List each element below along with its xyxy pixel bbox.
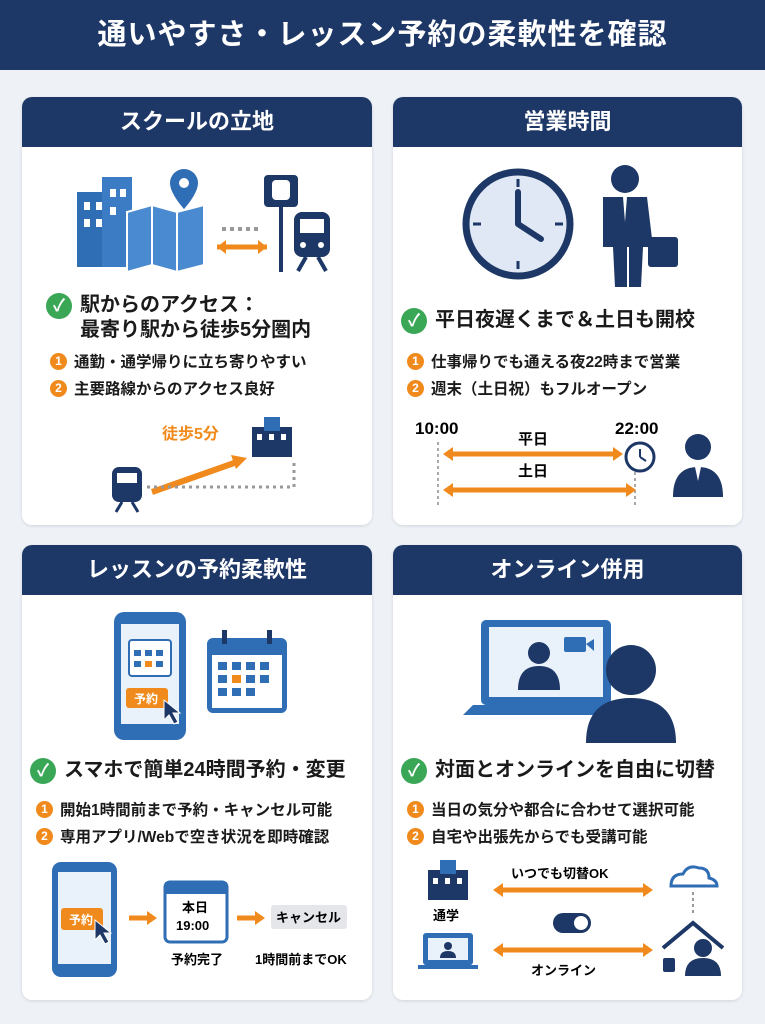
heading: online: [393, 545, 742, 595]
heading: online: オンライン併用: [490, 557, 644, 582]
panel: hours: 週末（土日祝）もフルオープン: [431, 381, 647, 398]
panel: hours: 2: [412, 380, 419, 394]
flow: booking: 1時間前までOK: [255, 952, 347, 967]
panel: online: [393, 545, 742, 1000]
title: 通いやすさ・レッスン予約の柔軟性を確認: [97, 19, 668, 51]
diagram: switch: オンライン: [531, 963, 596, 978]
list: booking points: 開始1時間前まで予約・キャンセル可能: [60, 802, 332, 819]
check: access: ✓: [53, 296, 65, 315]
panel: location: 主要路線からのアクセス良好: [74, 381, 275, 398]
flow: booking: 19:00: [176, 918, 209, 933]
check: access: 駅からのアクセス：: [80, 294, 259, 316]
icon: laptop with person: [463, 620, 676, 743]
check: 24h booking: スマホで簡単24時間予約・変更: [64, 759, 346, 781]
diagram: walk 5 min: [112, 417, 296, 513]
diagram: walk 5 min: 徒歩5分: [162, 425, 219, 443]
heading: booking: レッスンの予約柔軟性: [87, 557, 307, 582]
panel: booking: 専用アプリ/Webで空き状況を即時確認: [60, 829, 329, 846]
check: switch: 対面とオンラインを自由に切替: [435, 759, 715, 781]
icon: phone and calendar: 予約: [134, 691, 158, 706]
timeline: 22:00: [615, 419, 658, 438]
panel: booking: [22, 545, 372, 1000]
check: access: 最寄り駅から徒歩5分圏内: [80, 319, 311, 341]
list: online points: 1: [412, 802, 419, 816]
check: switch: ✓: [408, 761, 420, 780]
list: location points: 通勤・通学帰りに立ち寄りやすい: [74, 354, 307, 371]
title: [0, 0, 765, 70]
diagram: switch: いつでも切替OK: [511, 866, 609, 881]
timeline: 10:00: [415, 419, 458, 438]
list: online points: 当日の気分や都合に合わせて選択可能: [431, 802, 695, 819]
heading: booking: [22, 545, 372, 595]
heading: hours: 営業時間: [523, 109, 612, 134]
panel: location: [22, 97, 372, 525]
flow: booking: 予約完了: [171, 952, 223, 967]
icon: businessman: [603, 165, 678, 287]
list: hours points: 仕事帰りでも通える夜22時まで営業: [431, 354, 680, 371]
heading: hours: [393, 97, 742, 147]
icon: clock: [462, 168, 574, 280]
timeline: 土日: [518, 463, 548, 480]
list: booking points: 1: [41, 802, 48, 816]
panel: online: 2: [412, 828, 419, 842]
flow: booking: 予約: [69, 912, 93, 927]
list: location points: 1: [55, 354, 62, 368]
flow: booking: 本日: [182, 900, 208, 915]
timeline: [415, 419, 723, 505]
timeline: 平日: [518, 431, 548, 448]
icon: phone and calendar: [114, 612, 287, 740]
panel: hours: [393, 97, 742, 525]
check: access: [46, 293, 311, 341]
heading: location: スクールの立地: [120, 109, 274, 134]
check: late hours: 平日夜遅くまで＆土日も開校: [435, 309, 695, 331]
heading: location: [22, 97, 372, 147]
flow: booking: キャンセル: [276, 910, 341, 925]
panel: location: 2: [55, 380, 62, 394]
icon: city map and station: [77, 169, 330, 272]
diagram: switch: [418, 860, 724, 978]
check: 24h booking: ✓: [37, 761, 49, 780]
diagram: switch: 通学: [433, 908, 459, 923]
panel: booking: 2: [41, 828, 48, 842]
check: late hours: ✓: [408, 311, 420, 330]
flow: booking: [52, 862, 347, 977]
list: hours points: 1: [412, 354, 419, 368]
panel: online: 自宅や出張先からでも受講可能: [431, 829, 648, 846]
